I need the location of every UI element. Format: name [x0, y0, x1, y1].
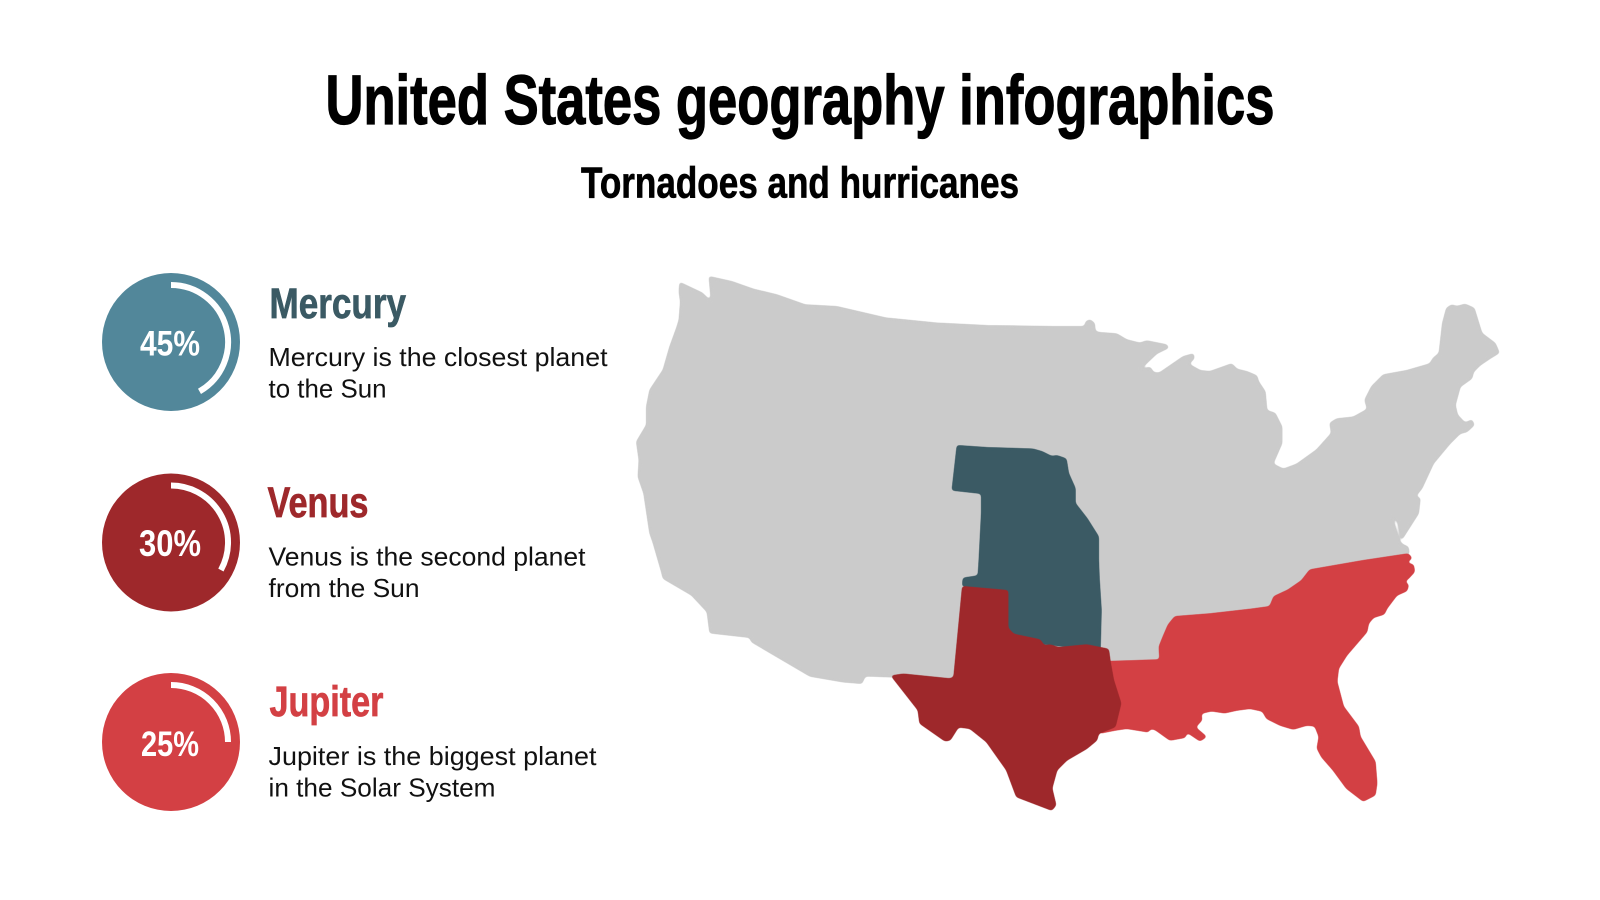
- donut: Jupiter 25%: 25%: [141, 725, 199, 764]
- heading: Venus: Venus: [268, 479, 368, 527]
- text: Mercury description: [268, 342, 608, 404]
- heading: Jupiter: Jupiter: [270, 678, 384, 726]
- panel: Venus: [102, 474, 586, 612]
- text: Jupiter description: Jupiter is the biggest planet: [268, 741, 597, 771]
- map region: tornado states (teal): [952, 446, 1101, 650]
- text: Jupiter description: [268, 741, 597, 802]
- text: Mercury description: to the Sun: [268, 374, 386, 404]
- donut: Venus 30%: [102, 474, 240, 612]
- map region: Gulf and Atlantic states (red): [1100, 554, 1414, 801]
- subtitle: Tornadoes and hurricanes: [581, 158, 1019, 208]
- panel: Mercury: [102, 273, 608, 411]
- text: Venus description: [268, 542, 586, 603]
- donut: Mercury 45%: 45%: [140, 324, 200, 364]
- map region: contiguous states (grey): [637, 277, 1499, 690]
- panel: Jupiter: [102, 673, 597, 811]
- donut: Jupiter 25%: [102, 673, 240, 811]
- map region: Texas (dark red): [892, 587, 1121, 810]
- title: United States geography infographics: [326, 61, 1274, 139]
- text: Mercury description: Mercury is the closest planet: [268, 342, 608, 372]
- heading: Mercury: Mercury: [270, 280, 406, 328]
- text: Jupiter description: in the Solar System: [268, 772, 496, 802]
- donut: Mercury 45%: [102, 273, 240, 411]
- text: Venus description: from the Sun: [268, 573, 420, 603]
- text: Venus description: Venus is the second planet: [268, 542, 586, 572]
- map: United States: [637, 277, 1499, 810]
- donut: Venus 30%: 30%: [139, 523, 201, 564]
